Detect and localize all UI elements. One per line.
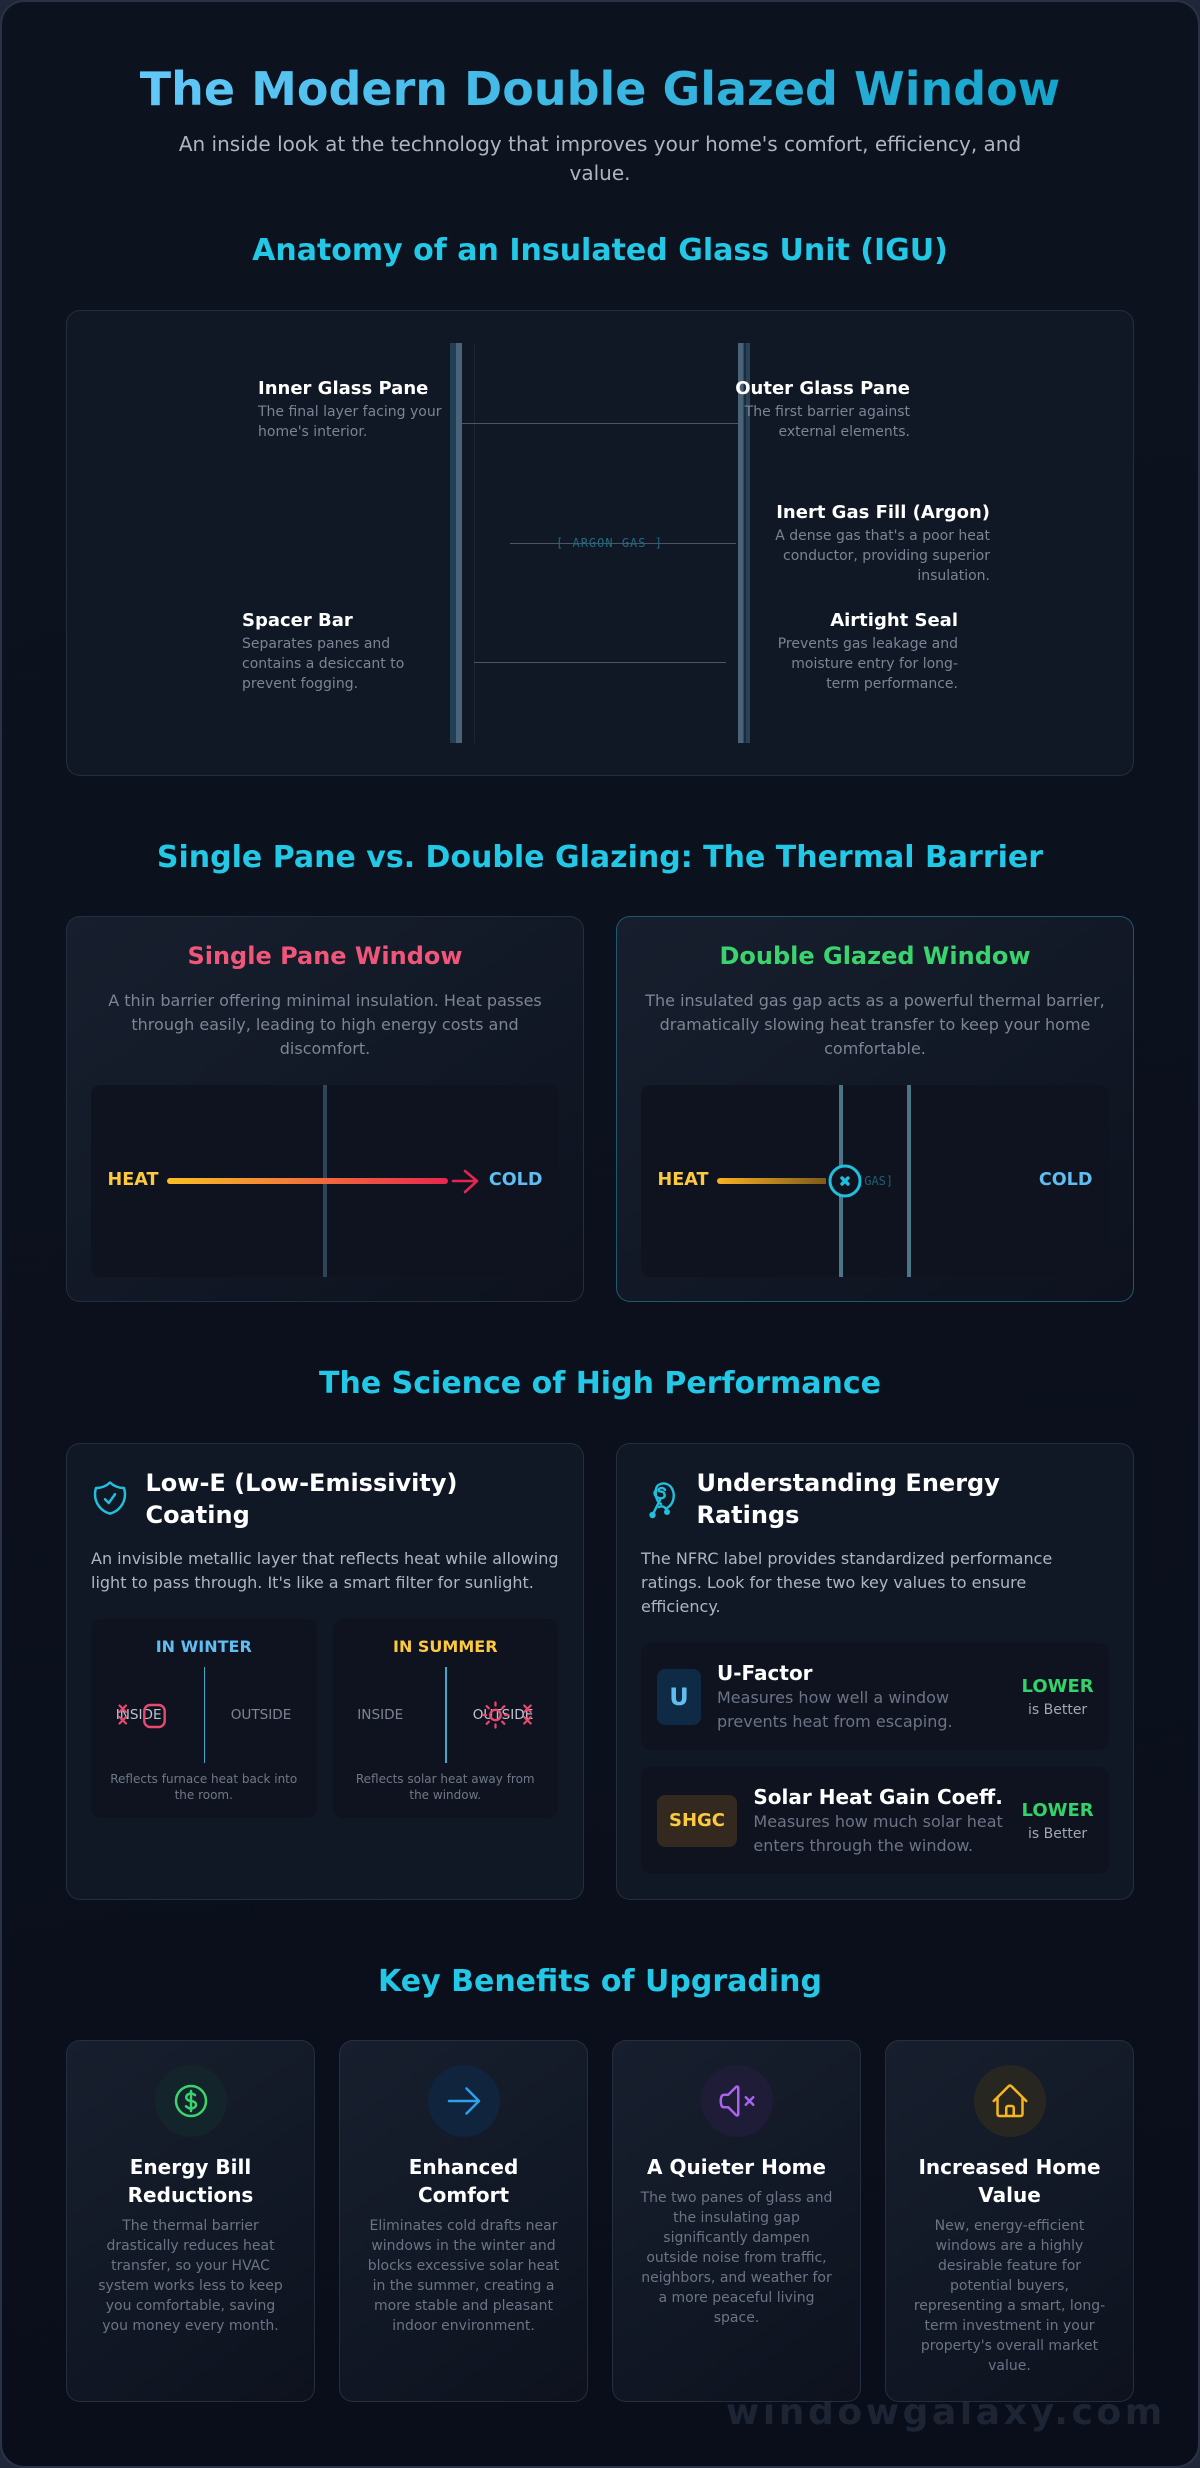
card text: potential buyers, [950, 2278, 1069, 2294]
label: inner glass pane: home's interior. [258, 424, 367, 440]
inner glass pane bar [450, 343, 462, 743]
winter caption: Reflects furnace heat back into [110, 1772, 297, 1786]
label: spacer bar: prevent fogging. [242, 676, 358, 692]
double glazed heading: Double Glazed Window [719, 942, 1031, 970]
heading: anatomy: Anatomy of an Insulated Glass Unit (IGU) [252, 233, 948, 268]
card heading: Enhanced [409, 2155, 518, 2179]
card text: in the summer, creating a [373, 2278, 554, 2294]
card text: indoor environment. [392, 2318, 535, 2334]
label: airtight seal [778, 610, 958, 692]
card text: value. [988, 2358, 1031, 2374]
card text: desirable feature for [938, 2258, 1081, 2274]
leader line: spacer [474, 662, 726, 663]
card text: system works less to keep [98, 2278, 283, 2294]
card text: space. [714, 2310, 759, 2326]
title: The Modern Double Glazed Window [140, 62, 1060, 116]
icon: furnace and reflected heat [118, 1704, 166, 1728]
single pane description [108, 991, 542, 1058]
card text: you comfortable, saving [106, 2298, 275, 2314]
low-e description: light to pass through. It's like a smart filter for sunlight. [91, 1573, 534, 1592]
card text: The two panes of glass and [641, 2190, 832, 2206]
label: airtight seal: moisture entry for long- [791, 656, 958, 672]
card text: more stable and pleasant [374, 2298, 553, 2314]
benefit card: energy bill [66, 2040, 315, 2402]
lower is better: LOWER [1022, 1800, 1094, 1820]
ratings description: efficiency. [641, 1597, 721, 1616]
badge: U: U [669, 1683, 689, 1711]
u-factor description: Measures how well a window [717, 1688, 949, 1707]
badge: SHGC: SHGC [669, 1810, 725, 1831]
label: outer glass pane: Outer Glass Pane [735, 378, 910, 398]
summer caption: Reflects solar heat away from [356, 1772, 535, 1786]
u-factor title: U-Factor [717, 1661, 813, 1685]
label: spacer bar [242, 610, 404, 692]
card heading: Reductions [128, 2183, 253, 2207]
coating line [445, 1667, 447, 1763]
low-e description: An invisible metallic layer that reflects heat while allowing [91, 1549, 559, 1568]
label: airtight seal: Airtight Seal [830, 610, 958, 630]
heat label: HEAT [658, 1170, 708, 1190]
label: inner glass pane [258, 378, 442, 440]
subtitle: value. [570, 161, 630, 185]
shgc description: Measures how much solar heat [753, 1812, 1003, 1831]
card text: significantly dampen [663, 2230, 810, 2246]
single pane description: discomfort. [280, 1039, 370, 1058]
summer caption: the window. [409, 1788, 481, 1802]
card text: a more peaceful living [658, 2290, 814, 2306]
lower is better: LOWER [1022, 1676, 1094, 1696]
card text: transfer, so your HVAC [111, 2258, 270, 2274]
label: inert gas fill [775, 502, 990, 584]
card heading: A Quieter Home [647, 2155, 826, 2179]
icon: shield check [94, 1481, 126, 1515]
ratings heading: Ratings [696, 1501, 799, 1529]
icon: sun and reflected heat [482, 1701, 532, 1729]
card heading: Increased Home [918, 2155, 1101, 2179]
lower is better [1022, 1676, 1094, 1718]
summer caption [356, 1772, 535, 1802]
label: inert gas fill: Inert Gas Fill (Argon) [776, 502, 990, 522]
subtitle: An inside look at the technology that improves your home's comfort, efficiency, and [179, 132, 1021, 156]
u-factor description [717, 1688, 953, 1731]
shgc title: Solar Heat Gain Coeff. [753, 1785, 1003, 1809]
winter caption [110, 1772, 297, 1802]
card text: windows are a highly [936, 2238, 1083, 2254]
card text: windows in the winter and [371, 2238, 556, 2254]
card text: The thermal barrier [122, 2218, 259, 2234]
card text: neighbors, and weather for [641, 2270, 832, 2286]
outer glass pane bar [738, 343, 750, 743]
single pane description: through easily, leading to high energy costs and [131, 1015, 519, 1034]
card text: drastically reduces heat [106, 2238, 275, 2254]
subtitle [179, 132, 1021, 185]
watermark: windowgalaxy.com [726, 2392, 1166, 2432]
card text: outside noise from traffic, [646, 2250, 827, 2266]
card heading: Value [978, 2183, 1041, 2207]
label: inner glass pane: Inner Glass Pane [258, 378, 428, 398]
badge: SHGC [657, 1795, 737, 1847]
single pane diagram [91, 1085, 559, 1277]
card text: representing a smart, long- [914, 2298, 1105, 2314]
low-e heading: Low-E (Low-Emissivity) [146, 1469, 457, 1497]
card text: term investment in your [925, 2318, 1094, 2334]
label: inert gas fill: A dense gas that's a poor heat [775, 528, 990, 544]
icon: muted speaker [700, 2065, 772, 2137]
first pane [839, 1085, 843, 1277]
cold label: COLD [1039, 1170, 1092, 1190]
card text: Eliminates cold drafts near [370, 2218, 557, 2234]
card heading [918, 2155, 1101, 2207]
card text: New, energy-efficient [935, 2218, 1084, 2234]
card text [368, 2218, 559, 2334]
benefit card: comfort [339, 2040, 588, 2402]
argon gas tag: [ ARGON GAS ] [556, 536, 663, 550]
label: spacer bar: Separates panes and [242, 636, 390, 652]
winter box [91, 1619, 316, 1818]
card text [914, 2218, 1105, 2374]
lower is better: is Better [1028, 1702, 1087, 1718]
lower is better: is Better [1028, 1826, 1087, 1842]
ratings heading: Understanding Energy [696, 1469, 1000, 1497]
icon: ratings glyph [649, 1482, 675, 1518]
arrow head [452, 1170, 478, 1194]
label: inner glass pane: The final layer facing your [258, 404, 441, 420]
card heading: Comfort [418, 2183, 509, 2207]
summer heading: IN SUMMER [393, 1637, 498, 1656]
label: outer glass pane: external elements. [778, 424, 910, 440]
barrier stop icon [828, 1164, 862, 1198]
low-e description [91, 1549, 559, 1592]
heading: benefits: Key Benefits of Upgrading [378, 1964, 822, 1999]
label: airtight seal: term performance. [826, 676, 958, 692]
blocked heat bar [717, 1178, 826, 1184]
label: spacer bar: contains a desiccant to [242, 656, 404, 672]
label: spacer bar: Spacer Bar [242, 610, 353, 630]
icon: house [974, 2065, 1046, 2137]
winter caption: the room. [175, 1788, 233, 1802]
winter heading: IN WINTER [156, 1637, 252, 1656]
double glazed description: comfortable. [824, 1039, 926, 1058]
heat label: HEAT [108, 1170, 158, 1190]
card text: blocks excessive solar heat [368, 2258, 559, 2274]
u-factor description: prevents heat from escaping. [717, 1712, 953, 1731]
low-e heading [146, 1469, 457, 1529]
heat arrow bar [167, 1178, 448, 1184]
low-e heading: Coating [146, 1501, 250, 1529]
ratings description: The NFRC label provides standardized performance [641, 1549, 1052, 1568]
single pane description: A thin barrier offering minimal insulation. Heat passes [108, 991, 542, 1010]
card text: property's overall market [921, 2338, 1098, 2354]
glass pane [323, 1085, 327, 1277]
card text: the insulating gap [673, 2210, 800, 2226]
panel: double glazed [616, 916, 1134, 1302]
outside label: OUTSIDE [231, 1707, 291, 1723]
double glazed description [645, 991, 1105, 1058]
heading: thermal barrier: Single Pane vs. Double Glazing: The Thermal Barrier [157, 840, 1043, 875]
ratings description: ratings. Look for these two key values to ensure [641, 1573, 1026, 1592]
cold label: COLD [489, 1170, 542, 1190]
shgc description [753, 1812, 1003, 1855]
inside label: INSIDE [116, 1707, 162, 1723]
leader line: panes [462, 423, 738, 424]
leader line: gas [510, 543, 736, 544]
card text [640, 2190, 832, 2326]
lower is better [1022, 1800, 1094, 1842]
spacer edge line [474, 343, 475, 743]
inside label: INSIDE [357, 1707, 403, 1723]
double glazed diagram [641, 1085, 1109, 1277]
shgc description: enters through the window. [753, 1836, 973, 1855]
ratings description [640, 1549, 1052, 1616]
heading: science: The Science of High Performance [319, 1366, 881, 1401]
gas tag: [GAS] [857, 1174, 893, 1188]
ratings heading [696, 1469, 1000, 1529]
single pane heading: Single Pane Window [187, 942, 463, 970]
card heading: Energy Bill [130, 2155, 251, 2179]
panel: low-e coating [66, 1443, 584, 1900]
label: outer glass pane: The first barrier against [745, 404, 910, 420]
second pane [907, 1085, 911, 1277]
coating line [204, 1667, 205, 1763]
panel: anatomy diagram [66, 310, 1134, 776]
icon: dollar [154, 2065, 226, 2137]
label: outer glass pane [735, 378, 910, 440]
panel: energy ratings [616, 1443, 1134, 1900]
label: airtight seal: Prevents gas leakage and [778, 636, 958, 652]
card text [98, 2218, 283, 2334]
double glazed description: dramatically slowing heat transfer to keep your home [660, 1015, 1090, 1034]
outside label: OUTSIDE [473, 1707, 533, 1723]
label: inert gas fill: insulation. [917, 568, 990, 584]
rating row: shgc [641, 1767, 1109, 1874]
label: inert gas fill: conductor, providing superior [783, 548, 990, 564]
benefit card: home value [885, 2040, 1134, 2402]
panel: single pane [66, 916, 584, 1302]
card heading [128, 2155, 253, 2207]
double glazed description: The insulated gas gap acts as a powerful thermal barrier, [645, 991, 1105, 1010]
summer box [332, 1619, 558, 1818]
badge: U [657, 1669, 701, 1725]
card heading [409, 2155, 518, 2207]
benefit card: quieter [612, 2040, 861, 2402]
rating row: u-factor [641, 1643, 1109, 1750]
card text: you money every month. [102, 2318, 279, 2334]
icon: arrow [428, 2065, 500, 2137]
